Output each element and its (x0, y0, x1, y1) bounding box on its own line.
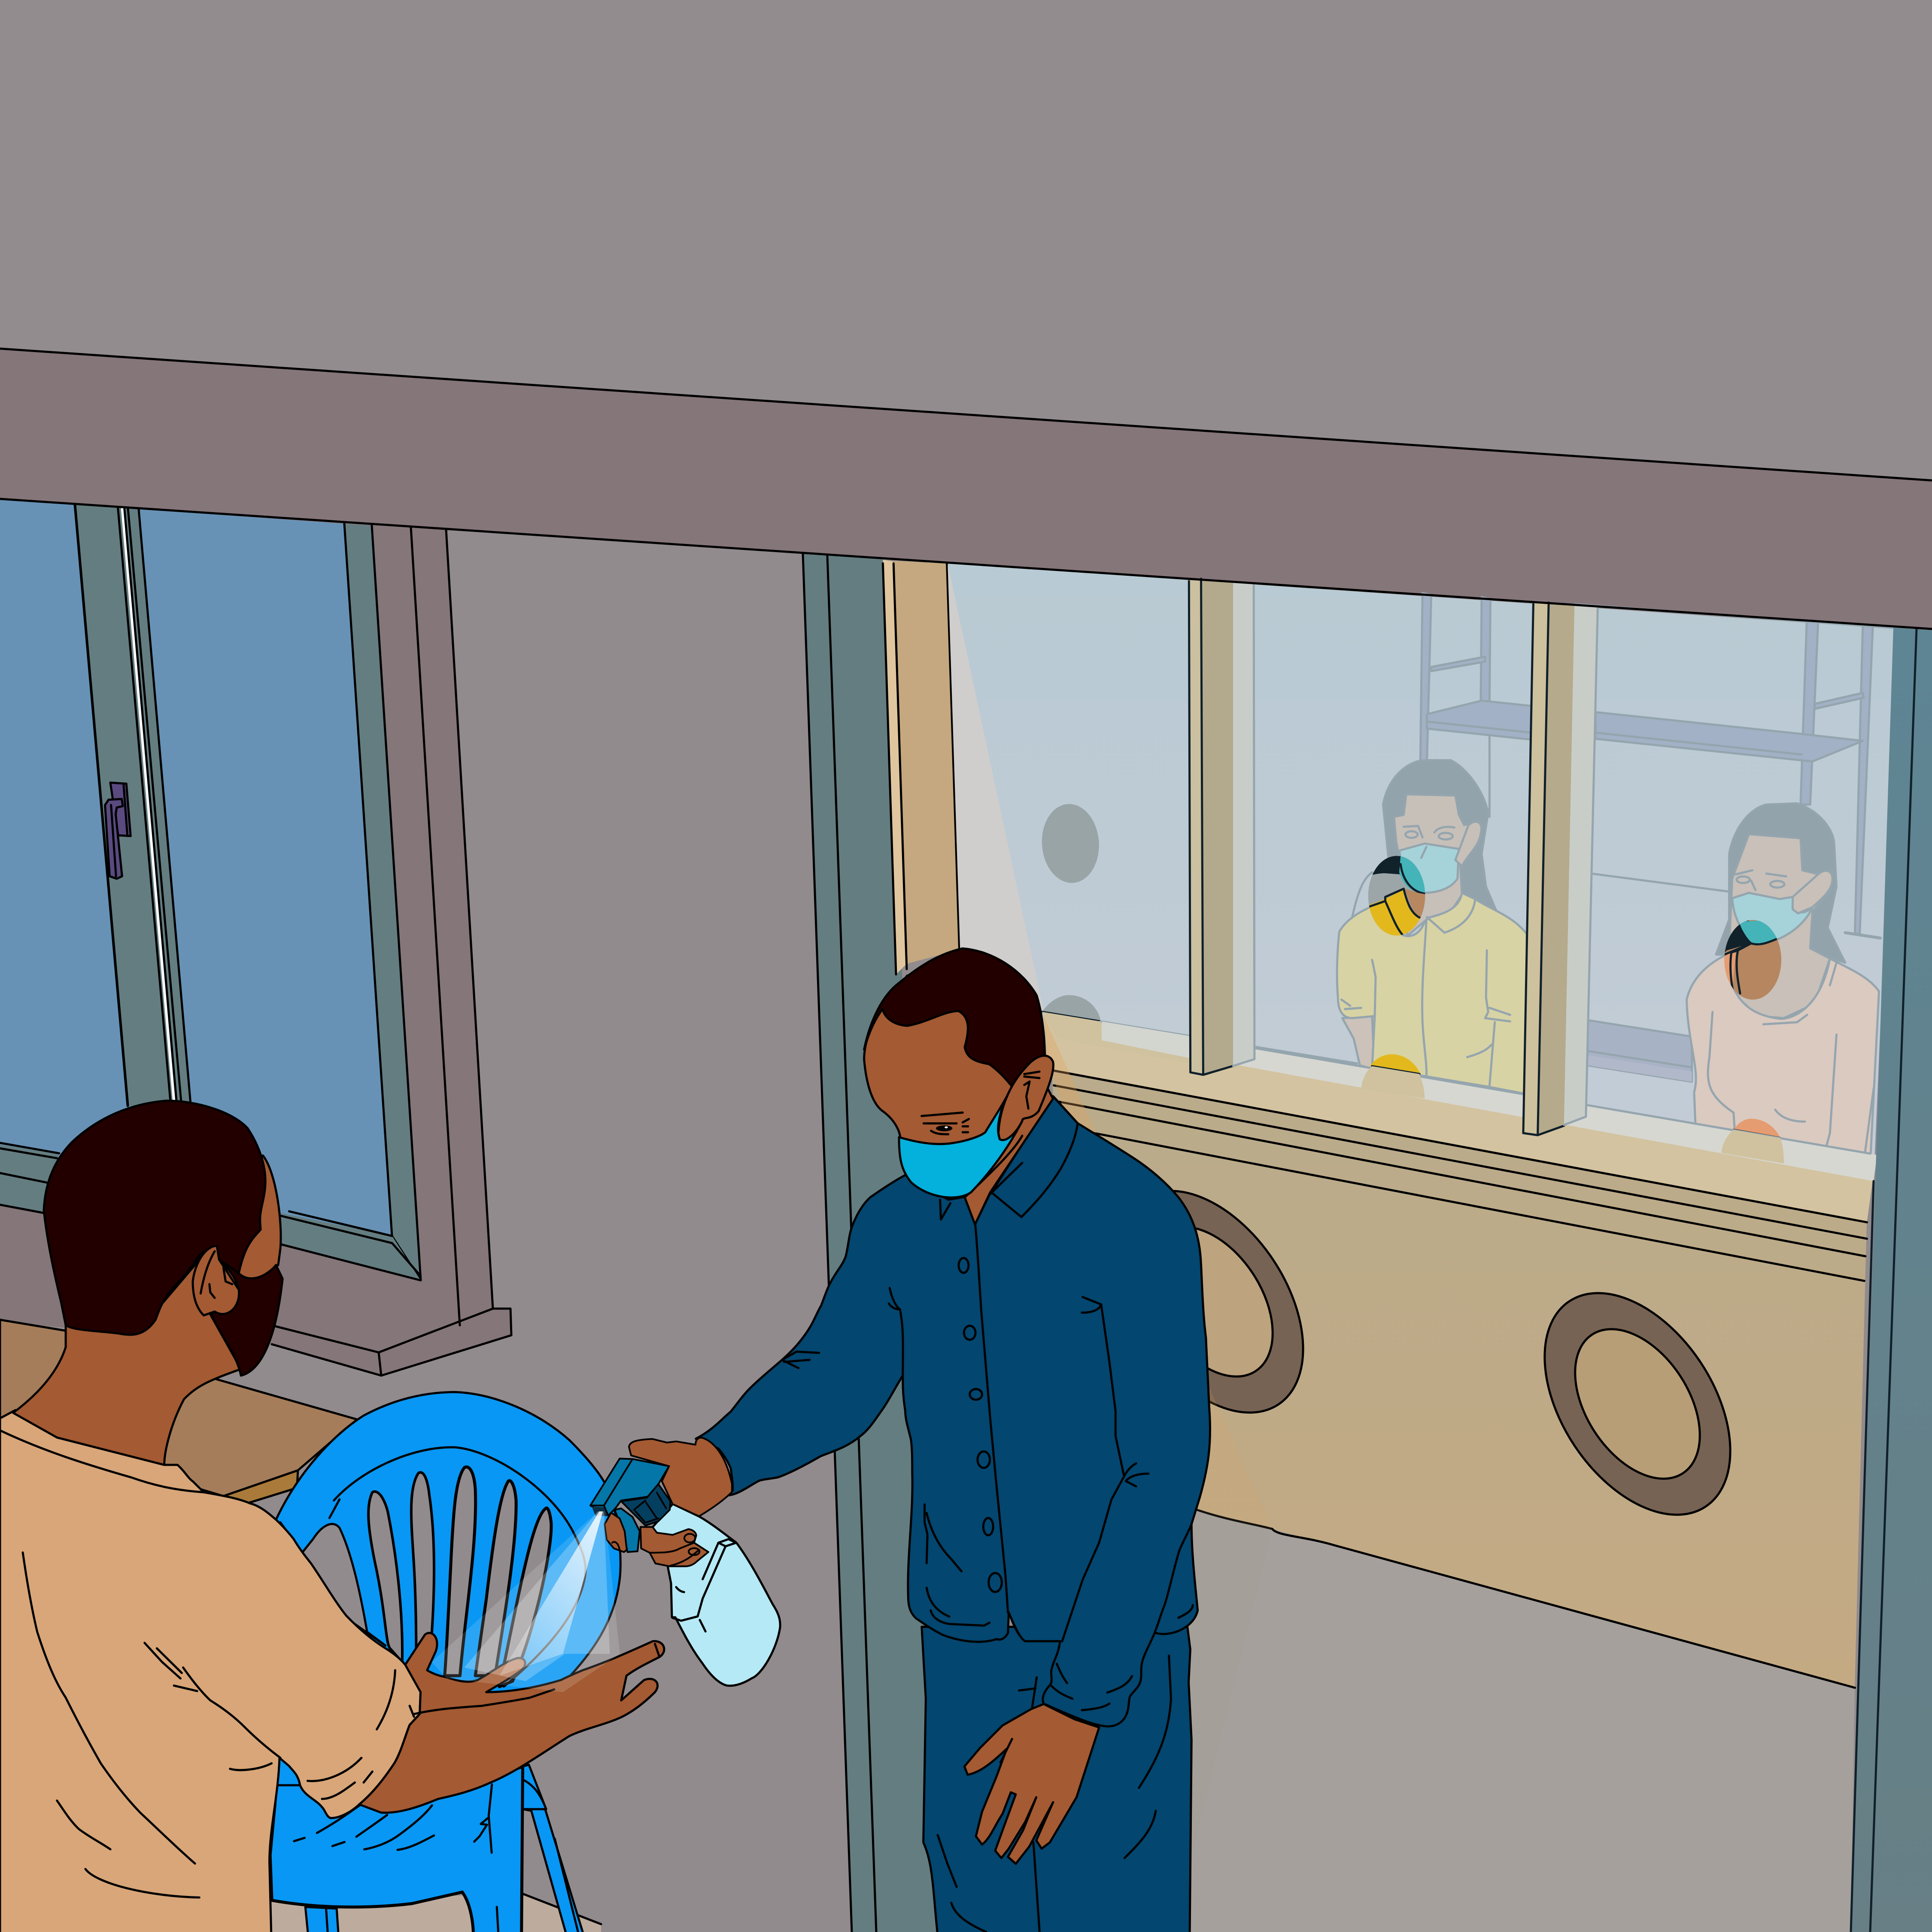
counter top (1044, 1012, 1876, 1224)
seated man head (13, 1101, 283, 1465)
counter ledge stripes (1054, 1071, 1867, 1688)
mask (1732, 893, 1812, 944)
black mask (210, 1260, 283, 1376)
glass circles and posts (883, 560, 1357, 1075)
chair back inner arc (334, 1447, 586, 1687)
right window frame (344, 524, 421, 1280)
jacket (696, 1096, 1210, 1726)
shirt (1687, 954, 1879, 1154)
woman in pink shirt (1687, 803, 1879, 1154)
arms (1343, 1016, 1374, 1069)
trousers (922, 1627, 1191, 1932)
beam lower edge (1574, 604, 1893, 628)
chair back (272, 1392, 620, 1785)
upper hand (629, 1437, 732, 1516)
front (1052, 1072, 1867, 1688)
lower window frames (0, 1143, 421, 1280)
table (0, 1320, 357, 1503)
ear (1455, 822, 1481, 866)
ceiling beam (0, 349, 1932, 629)
spray bottle (653, 1504, 780, 1686)
counter edge line (1042, 1012, 1101, 1021)
jacket main (696, 1096, 1210, 1726)
centre post (1188, 579, 1357, 1075)
light beam on booth (1030, 1009, 1272, 1932)
ear (193, 1246, 239, 1315)
right post and pillar (1523, 602, 1893, 1135)
window handle (105, 783, 131, 879)
trigger (615, 1508, 640, 1552)
hair (44, 1101, 265, 1335)
seated man shirt (0, 1410, 421, 1932)
floor under chair (264, 1894, 601, 1932)
window sash (75, 502, 191, 1106)
left door post (883, 560, 960, 975)
face and neck (1729, 834, 1832, 1018)
floor circle woman 1 (1370, 1054, 1420, 1074)
light triangle on glass (948, 563, 1044, 1012)
mask strap and ear (1736, 870, 1832, 913)
glass sill reflection (1044, 1012, 1877, 1181)
left hand hanging (964, 1704, 1099, 1864)
window reveal and sill (0, 499, 511, 1376)
eyes (1403, 826, 1455, 858)
buttons (959, 1258, 1002, 1592)
sill lines (272, 524, 511, 1376)
right door pillar (1851, 628, 1932, 1932)
sprayer body (590, 1458, 669, 1516)
round hole on glass (1039, 802, 1102, 885)
eye (922, 1112, 969, 1134)
shirt details (1708, 963, 1874, 1153)
booth glass pane (948, 563, 1898, 1181)
face and neck (1394, 794, 1479, 936)
head (864, 948, 1078, 1224)
sprayer nozzle (592, 1507, 608, 1516)
face (864, 975, 1014, 1158)
neck and head skin (13, 1155, 281, 1465)
slots (368, 1492, 402, 1662)
thumb (605, 1513, 627, 1552)
seated man (0, 1101, 664, 1932)
beam bottom edge (0, 499, 1932, 629)
hair (1716, 803, 1845, 963)
clear porthole view of woman 1 (1368, 856, 1425, 936)
bunk beds behind glass (1420, 593, 1880, 1082)
standing man (590, 948, 1210, 1932)
ear (998, 1056, 1053, 1140)
half round hole on glass (1042, 995, 1101, 1021)
mask (1399, 844, 1459, 893)
shirt details (1341, 900, 1510, 1086)
shirt (1337, 893, 1527, 1094)
face mask (899, 1086, 1022, 1197)
booth front panel (1044, 1012, 1876, 1688)
hand holding sprayer (590, 1437, 732, 1566)
jacket lines (782, 1222, 1193, 1710)
hand sanitiser spray mist (431, 1511, 620, 1692)
tinted counter under hole (1042, 1012, 1190, 1063)
jacket tail (1009, 1524, 1198, 1641)
left window (0, 499, 511, 1376)
woman in yellow shirt (1337, 760, 1527, 1096)
door column left (803, 552, 945, 1932)
lower fingers (641, 1527, 708, 1566)
sprayer cap (621, 1484, 671, 1525)
left bunk bed (1420, 593, 1532, 817)
window glass (0, 499, 392, 1236)
neck (965, 1079, 1053, 1224)
seated man arm and hand (359, 1633, 664, 1813)
blue plastic chair (270, 1392, 620, 1932)
booth floor (1073, 1477, 1855, 1932)
collar (991, 1096, 1078, 1217)
floor circle woman 2 (1734, 1119, 1780, 1138)
clear porthole view of woman 2 (1722, 920, 1784, 1002)
counter tops under women (1361, 1066, 1784, 1163)
ceiling (0, 0, 1932, 480)
left opening (280, 1522, 386, 1646)
right bunk bed (1588, 622, 1880, 1082)
right window post (1523, 602, 1598, 1135)
hair (1383, 760, 1498, 915)
hair (864, 948, 1045, 1086)
chair seat and legs (270, 1758, 584, 1932)
porthole left (1079, 1157, 1341, 1446)
porthole right (1507, 1260, 1768, 1548)
